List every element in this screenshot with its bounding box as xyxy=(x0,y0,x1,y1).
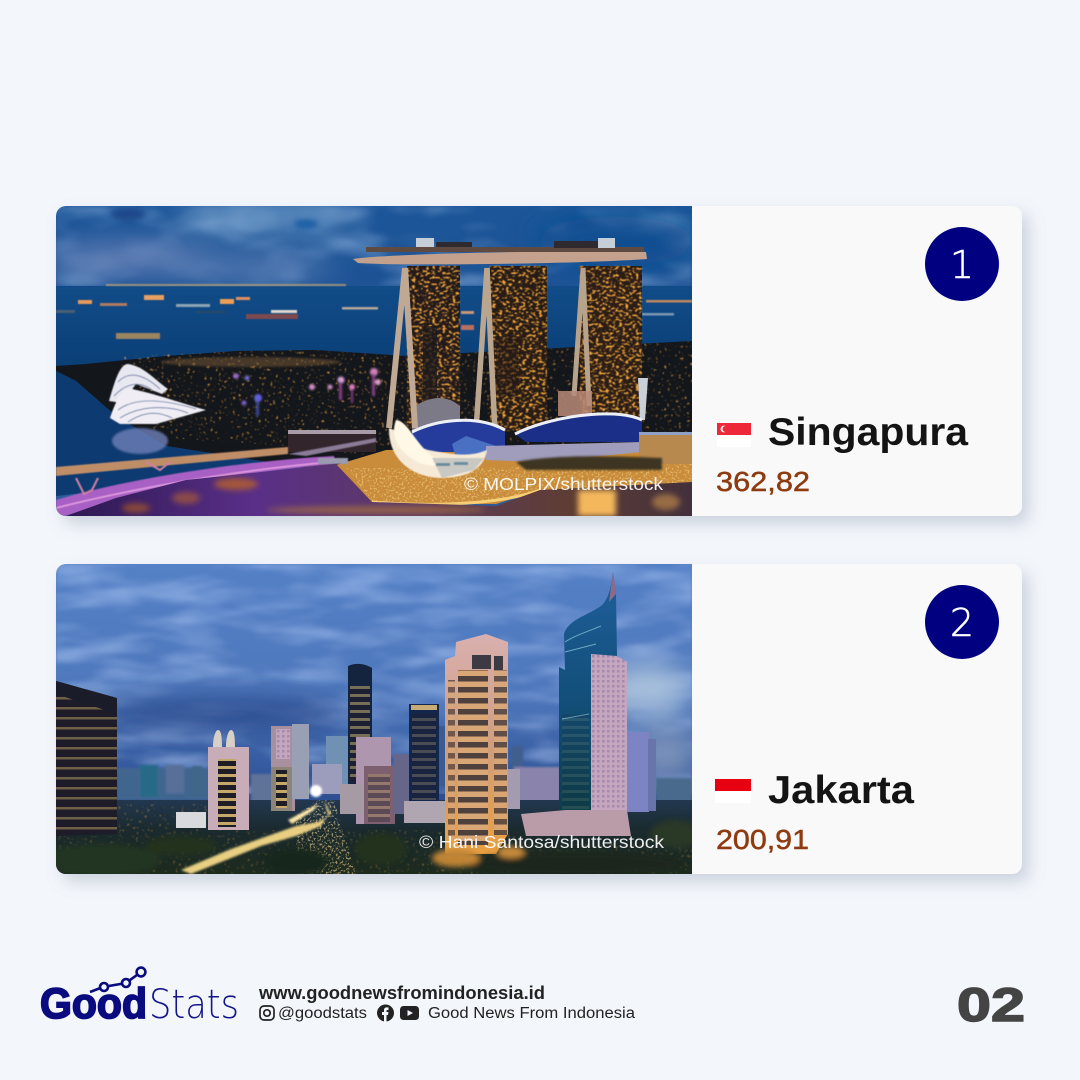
icon: facebook xyxy=(377,1004,394,1022)
instagram handle: @goodstats xyxy=(278,1005,367,1022)
rank badge 2 xyxy=(925,585,999,659)
photo: Marina Bay Sands skyline at dusk xyxy=(36,206,696,516)
foreground trees xyxy=(41,820,702,876)
panel: Singapura card xyxy=(36,206,1022,516)
card background xyxy=(56,206,1022,516)
photo credit: © Hani Santosa/shutterstock xyxy=(419,832,664,852)
left dark tower xyxy=(56,681,117,836)
purple towers xyxy=(508,732,656,812)
city name: Singapura: Singapura xyxy=(768,411,968,454)
mid towers xyxy=(271,724,348,811)
SkyPark deck xyxy=(353,238,647,264)
Wisma BNI tower xyxy=(521,572,631,836)
distant skyline xyxy=(117,746,692,800)
lower ground and trees base xyxy=(56,800,692,874)
rank badge 1 xyxy=(925,227,999,301)
blue glass tower xyxy=(394,704,445,823)
rank badge 1: 1 xyxy=(950,243,974,287)
photo: Jakarta skyline at dusk xyxy=(41,564,702,876)
city name: Jakarta: Jakarta xyxy=(768,769,914,812)
rank badge 2: 2 xyxy=(950,601,974,645)
value: Jakarta: 200,91 xyxy=(716,824,809,855)
social name: Good News From Indonesia xyxy=(428,1005,635,1022)
logo: GoodStats xyxy=(40,968,239,1028)
Marina Bay Sands towers xyxy=(389,266,648,432)
logo wordmark Good: Good xyxy=(40,980,147,1028)
logo chart line icon xyxy=(90,968,145,992)
bay water xyxy=(66,464,692,516)
dark slim tower xyxy=(348,664,372,784)
white twin-eared tower xyxy=(208,730,249,830)
flag: Singapore xyxy=(717,423,751,447)
mauve towers xyxy=(340,737,395,824)
glowing roads xyxy=(181,785,356,874)
icon: instagram xyxy=(260,1006,274,1020)
website url: www.goodnewsfromindonesia.id xyxy=(258,983,545,1003)
value: Singapura: 362,82 xyxy=(716,466,810,497)
page number: 02 xyxy=(957,978,1025,1031)
photo credit: © MOLPIX/shutterstock xyxy=(464,474,663,494)
convention centre, roofs and waterfront xyxy=(288,414,692,506)
roads and helix bridge xyxy=(56,438,376,516)
land: Gardens by the Bay xyxy=(56,341,692,476)
flower dome conservatory xyxy=(109,364,206,424)
tall office tower with lit stripes xyxy=(445,634,508,854)
flag: Indonesia xyxy=(715,779,751,803)
panel: Jakarta card xyxy=(41,564,1022,876)
white low block xyxy=(176,812,206,828)
ArtScience Museum lotus xyxy=(389,420,487,478)
card background xyxy=(56,564,1022,874)
icon: youtube xyxy=(400,1006,419,1020)
distant ships and lights xyxy=(56,284,692,339)
logo wordmark Stats: Stats xyxy=(149,982,239,1028)
